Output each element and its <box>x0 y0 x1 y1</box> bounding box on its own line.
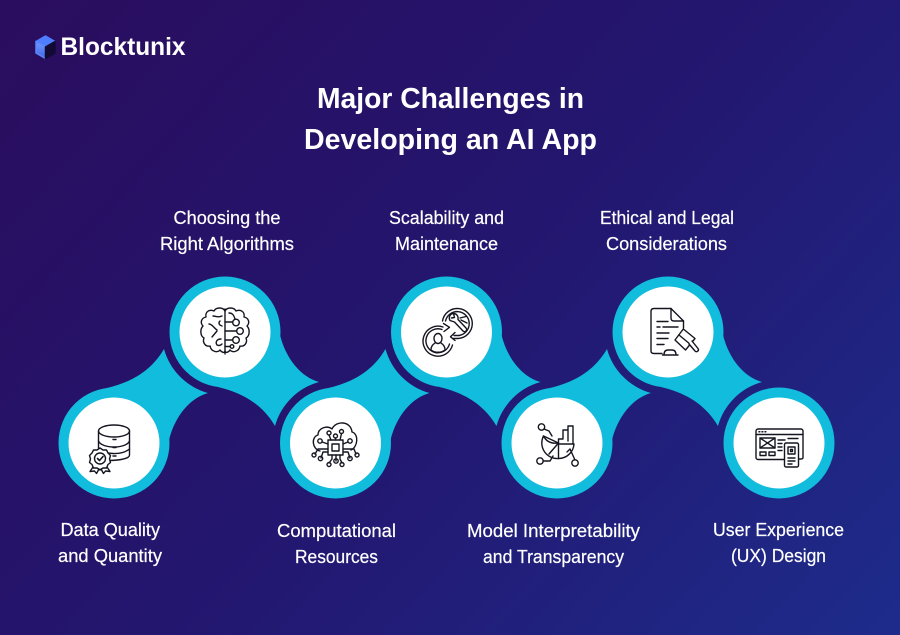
step: Computational Resources <box>280 388 391 498</box>
label: Scalability and Maintenance: Scalability and <box>389 208 504 228</box>
step: User Experience (UX) Design <box>724 388 834 498</box>
label: Model Interpretability and Transparency: and Transparency <box>483 547 624 567</box>
title: Major Challenges in <box>317 83 584 115</box>
icon: analytics pie and bars <box>537 424 578 466</box>
icon: brain circuit <box>201 308 249 354</box>
timeline connector shapes <box>107 332 762 443</box>
title <box>304 83 597 156</box>
label: Computational Resources: Computational <box>277 521 396 541</box>
icon: maintenance cycle <box>423 309 472 356</box>
label: User Experience (UX) Design: User Experience <box>713 520 844 540</box>
step: Choosing the Right Algorithms <box>170 276 280 388</box>
logo: Blocktunix <box>36 33 186 61</box>
label: Ethical and Legal Considerations: Ethical and Legal <box>600 208 734 228</box>
step: Model Interpretability and Transparency <box>502 388 612 498</box>
label: User Experience (UX) Design <box>713 520 844 566</box>
icon: cube <box>36 36 55 58</box>
brand name: Blocktunix <box>60 33 186 61</box>
label: Computational Resources: Resources <box>295 547 378 567</box>
label: Data Quality and Quantity: Data Quality <box>60 520 160 540</box>
label: Data Quality and Quantity: and Quantity <box>58 546 162 566</box>
title: Developing an AI App <box>304 124 597 156</box>
icon: database with badge <box>90 425 130 474</box>
step: Ethical and Legal Considerations <box>612 276 724 388</box>
label: Choosing the Right Algorithms <box>160 208 294 254</box>
icon: UI wireframe <box>756 429 803 467</box>
label: Computational Resources <box>277 521 396 567</box>
step: Data Quality and Quantity <box>58 388 170 498</box>
label: User Experience (UX) Design: (UX) Design <box>731 546 826 566</box>
label: Ethical and Legal Considerations: Considerations <box>606 234 727 254</box>
icon: legal document with gavel <box>651 308 698 355</box>
label: Scalability and Maintenance <box>389 208 504 254</box>
label: Ethical and Legal Considerations <box>600 208 734 254</box>
icon: cloud with chip <box>312 423 359 466</box>
label: Data Quality and Quantity <box>58 520 162 566</box>
label: Choosing the Right Algorithms: Right Algorithms <box>160 234 294 254</box>
label: Model Interpretability and Transparency: Model Interpretability <box>467 521 640 541</box>
label: Choosing the Right Algorithms: Choosing the <box>174 208 280 228</box>
label: Scalability and Maintenance: Maintenance <box>395 234 498 254</box>
label: Model Interpretability and Transparency <box>467 521 640 567</box>
step: Scalability and Maintenance <box>391 276 502 388</box>
